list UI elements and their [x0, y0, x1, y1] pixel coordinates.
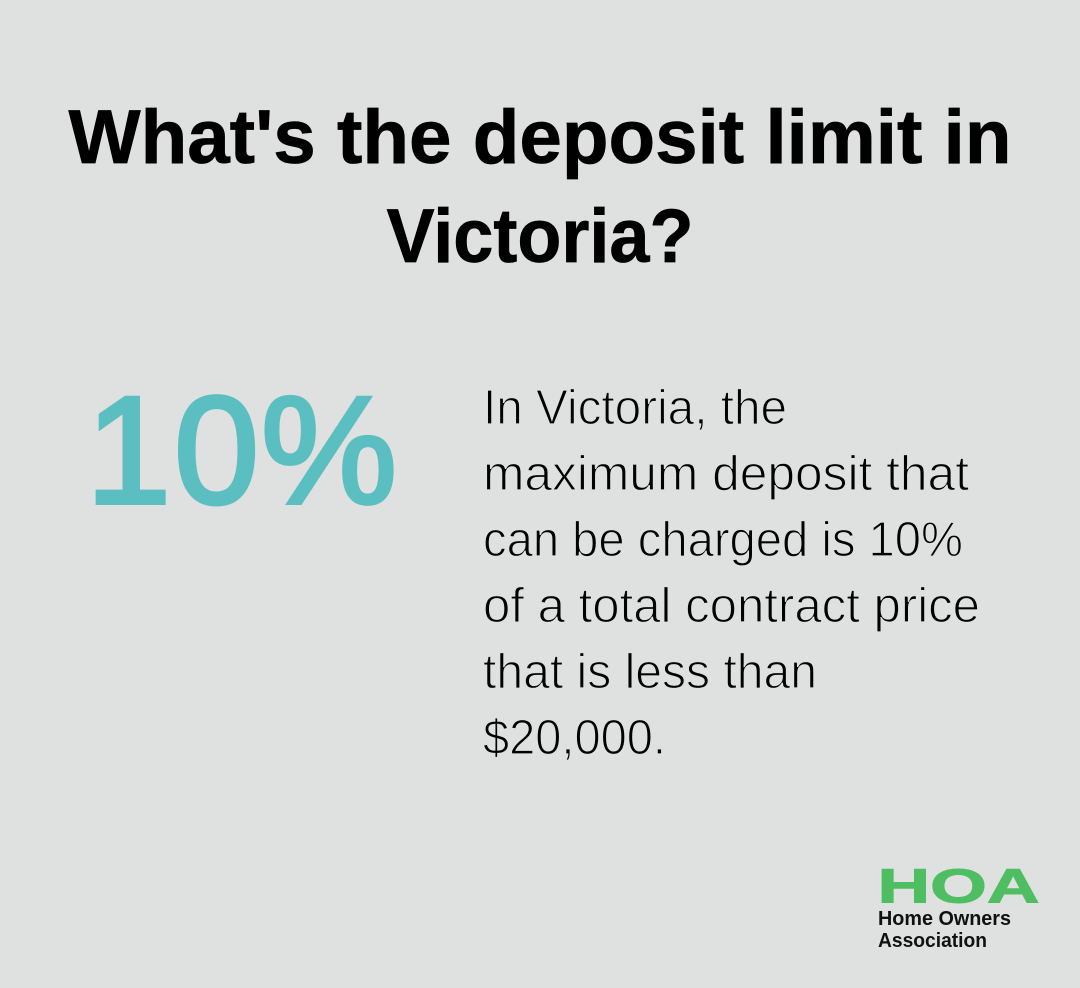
title: Victoria? — [386, 194, 694, 279]
body text: that is less than — [483, 645, 817, 699]
big statistic: 10%: 10% — [86, 365, 397, 536]
logo caption: Home Owners — [878, 908, 1011, 930]
body text: maximum deposit that — [483, 447, 969, 501]
logo caption: Association — [878, 930, 987, 952]
title: What's the deposit limit in — [68, 95, 1011, 180]
logo wordmark: HOA: HOA — [878, 860, 1040, 914]
logo caption — [878, 908, 1011, 952]
body text: $20,000. — [483, 711, 666, 765]
body text: In Victoria, the — [483, 381, 787, 435]
logo: Home Owners Association — [878, 860, 1040, 952]
body text — [483, 381, 980, 765]
body text: can be charged is 10% — [483, 513, 963, 567]
title — [68, 95, 1011, 279]
body text: of a total contract price — [483, 579, 980, 633]
